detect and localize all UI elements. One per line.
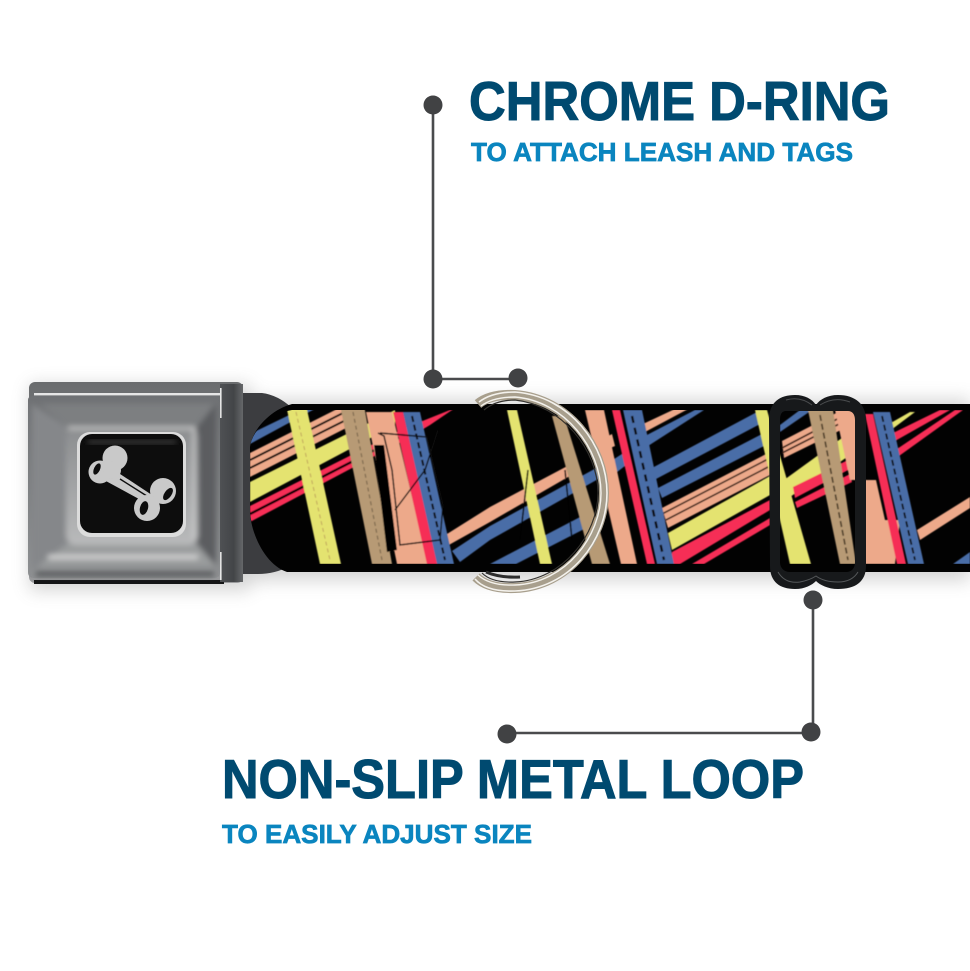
icon: bone badge [80,434,183,533]
infographic: dog collar features [22,81,970,844]
strap base [250,404,970,572]
vertical stripes right section [808,410,924,564]
plaid pattern [250,405,970,564]
diagonal stripes left section [250,405,600,564]
diagonal stripes right section [780,410,970,564]
shadow under collar [30,385,970,590]
buckle bevel highlights [32,404,216,574]
metal loop [769,395,866,589]
buckle dark tab [240,393,292,574]
leader line: D-ring [424,96,528,388]
buckle body [29,382,243,583]
collar strap [250,404,970,572]
heading: chrome D-ring: CHROME D-RING [469,70,890,132]
leader line: metal loop [498,590,822,744]
seatbelt buckle [28,382,292,584]
heading: metal loop: NON-SLIP METAL LOOP [222,748,804,810]
vertical stripes centre section [507,410,811,564]
subheading: adjust size: TO EASILY ADJUST SIZE [222,819,532,849]
diagonal stripes centre section [608,410,770,564]
icon: bone [88,446,176,521]
chrome D-ring [475,392,607,591]
subheading: attach leash: TO ATTACH LEASH AND TAGS [471,137,853,167]
vertical stripes left section [286,405,454,564]
